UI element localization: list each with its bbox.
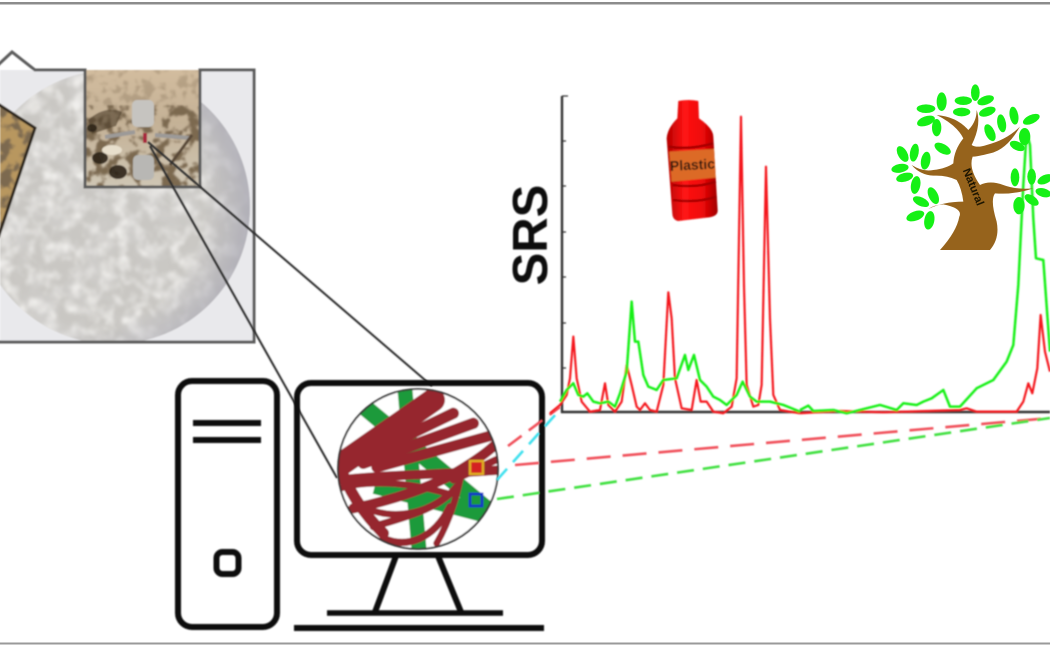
dashed connector lines bbox=[497, 407, 1050, 499]
inset photo: left tilted sample bbox=[0, 106, 34, 228]
left inset outline bbox=[0, 104, 35, 238]
lens outline bbox=[338, 389, 498, 549]
panel: moon sample photo bbox=[0, 52, 260, 350]
zoom lines from sample to monitor bbox=[148, 142, 432, 478]
moon surface bbox=[0, 73, 250, 342]
series: plastic spectrum (red) bbox=[550, 117, 1050, 413]
inset photo: sample close-up bbox=[85, 70, 200, 187]
series: natural spectrum (green) bbox=[560, 132, 1050, 413]
bottle ribs bbox=[668, 143, 717, 201]
icon: plastic bottle bbox=[667, 100, 718, 221]
bottom border bbox=[0, 642, 1050, 644]
icon: natural tree bbox=[891, 84, 1050, 250]
bottle label text: Plastic bbox=[669, 155, 716, 174]
marker: plastic region bbox=[470, 461, 483, 474]
y-axis label: SRS bbox=[504, 185, 558, 285]
lens background bbox=[338, 389, 498, 549]
marker: natural region bbox=[470, 494, 482, 506]
icon: computer tower bbox=[178, 381, 277, 627]
bottle label band bbox=[669, 149, 716, 182]
tree trunk and branches bbox=[912, 110, 1033, 250]
icon: computer monitor bbox=[294, 383, 544, 628]
microscope view of fibres bbox=[338, 389, 500, 560]
natural fibres (green) bbox=[362, 390, 500, 560]
chart axes bbox=[561, 96, 1050, 413]
tree label text: Natural bbox=[960, 167, 986, 208]
frame outline bbox=[0, 52, 254, 342]
chart: SRS spectra bbox=[550, 96, 1050, 413]
frame background bbox=[0, 70, 254, 342]
plastic fibres (red) bbox=[340, 400, 500, 543]
tree leaves bbox=[891, 84, 1050, 230]
top border bbox=[0, 2, 1050, 4]
